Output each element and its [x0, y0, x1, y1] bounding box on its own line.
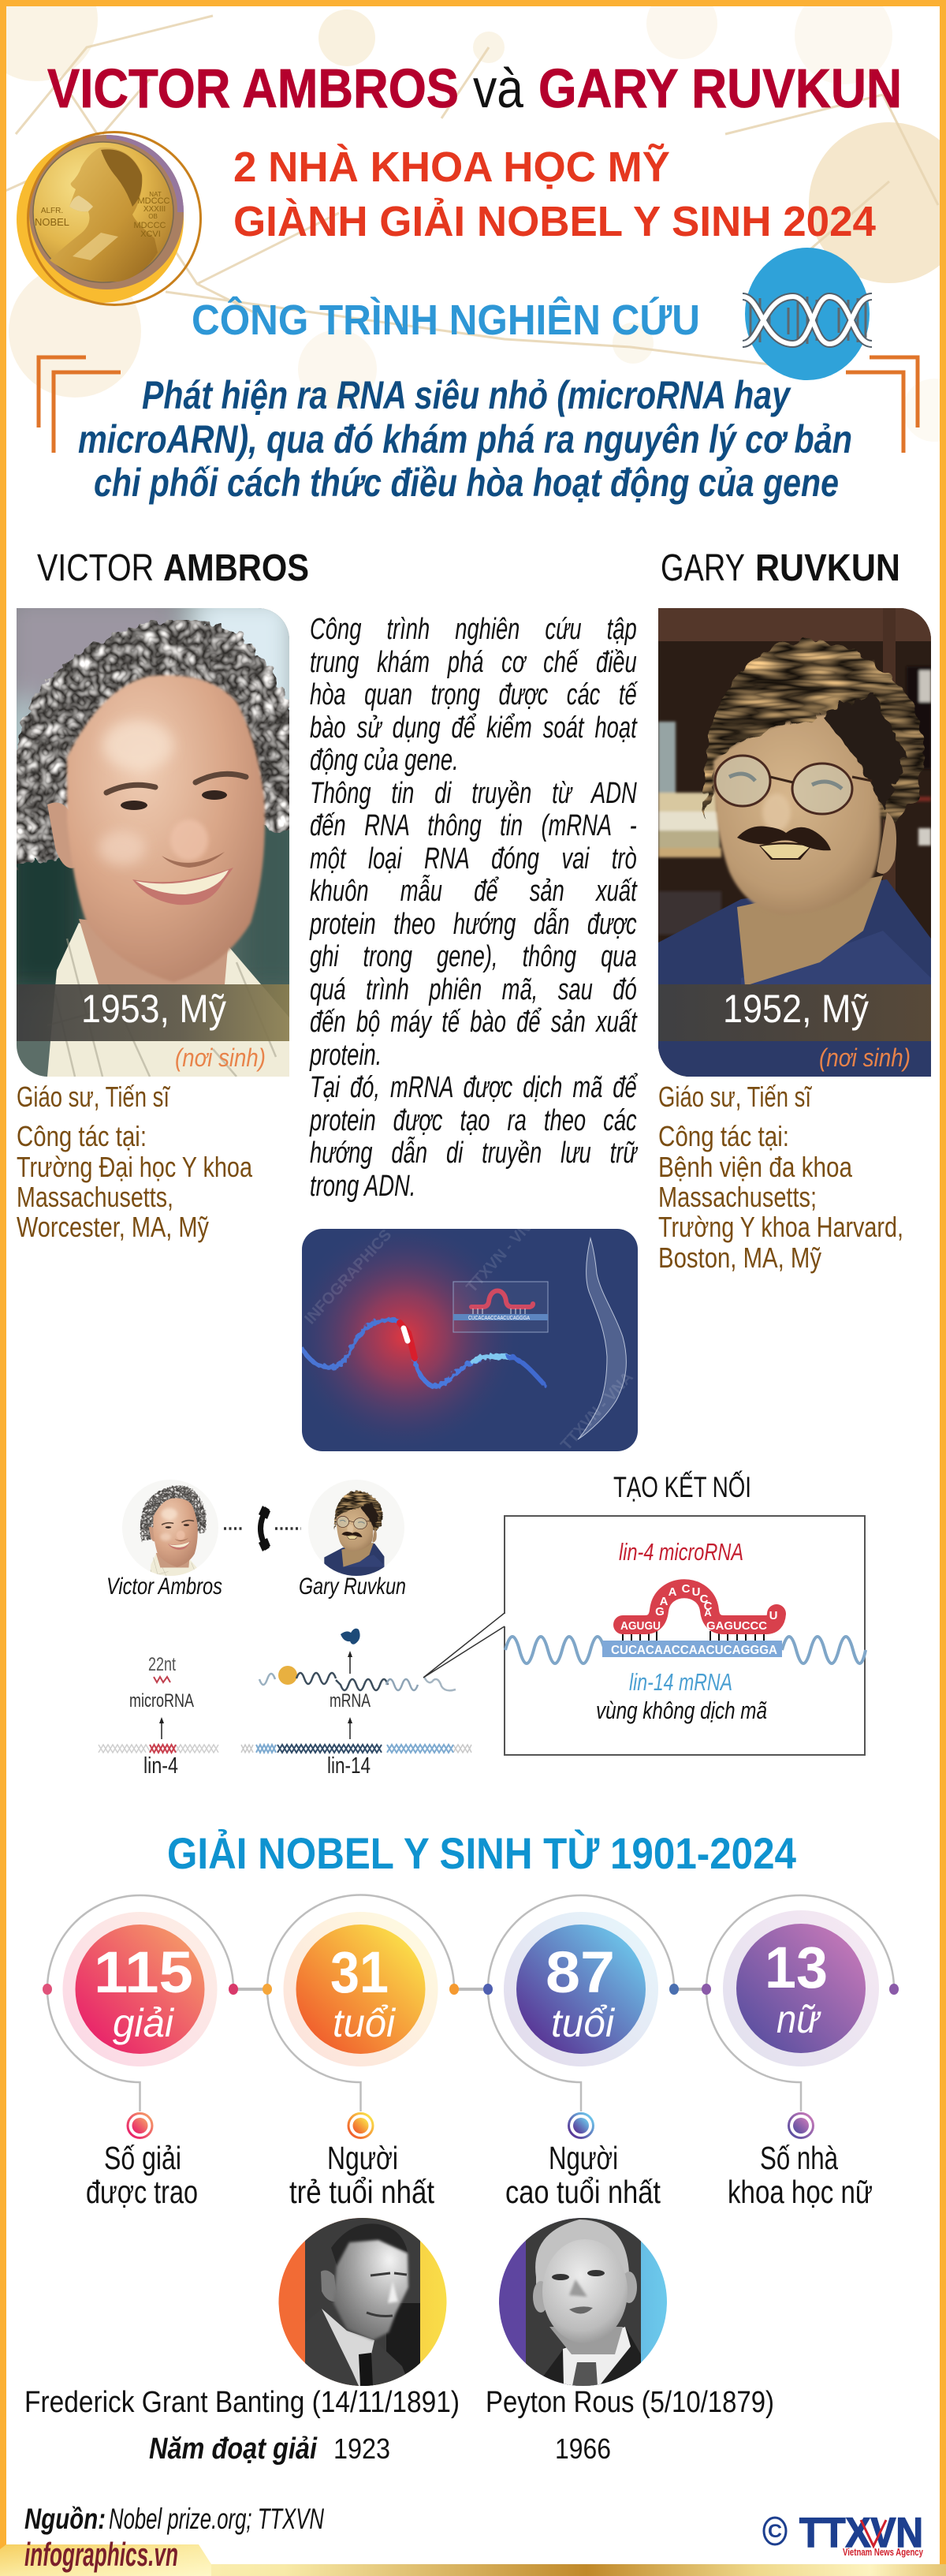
text block: research description: động của gene.: [310, 744, 459, 777]
captions: laureates: Frederick Grant Banting (14/11/1891): [24, 2386, 460, 2419]
text block: research description: ghi trong gene), thông qua: [310, 940, 637, 973]
diagram: lin-4 gene: [99, 1654, 218, 1779]
text block: research description: Thông tin di truyền từ ADN: [310, 776, 637, 809]
affiliation: Gary Ruvkun: Công tác tại:: [658, 1120, 789, 1152]
base pairs: [623, 1631, 764, 1642]
text block: research description: quá trình phiên mã, sau đó: [310, 973, 637, 1006]
callout: lin-4 and lin-14 binding: C: [700, 1592, 709, 1606]
diagram: lin-14 gene: mRNA: [330, 1690, 371, 1712]
award year row: 1966: [555, 2432, 611, 2465]
captions: laureates: Peyton Rous (5/10/1879): [486, 2386, 774, 2419]
stat: youngest 31: [263, 1895, 459, 2210]
callout: lin-4 and lin-14 binding: lin-14 mRNA: [629, 1668, 732, 1696]
stat: 115 awards: được trao: [86, 2174, 198, 2210]
text block: research description: [309, 613, 639, 1202]
stat: 115 awards: [43, 1895, 238, 2210]
portrait: Victor Ambros: [17, 608, 289, 1077]
affiliation: Victor Ambros: Giáo sư, Tiến sĩ: [17, 1081, 171, 1113]
subtitle: 2 NHÀ KHOA HỌC MỸ: [233, 144, 670, 191]
stat: 13 women: nữ: [777, 1997, 821, 2041]
icon: DNA helix: [743, 248, 872, 380]
callout: lin-4 and lin-14 binding: A: [669, 1585, 677, 1599]
stat: oldest 87: Người: [549, 2140, 618, 2176]
stat: 13 women: Số nhà: [760, 2140, 838, 2176]
affiliation: Victor Ambros: [17, 1081, 253, 1243]
callout: lin-4 and lin-14 binding: [423, 1516, 866, 1755]
portrait: Frederick Grant Banting: [278, 2218, 447, 2386]
text block: research description: khuôn mẫu để sản xuất: [310, 875, 637, 908]
title: VICTOR AMBROS: [47, 58, 459, 119]
medal inscription: XCVI: [140, 230, 161, 239]
diagram: lin-4 gene: 22nt: [148, 1654, 176, 1675]
affiliation: Gary Ruvkun: Massachusetts;: [658, 1181, 817, 1213]
portrait: Victor Ambros: 1953, Mỹ: [81, 987, 226, 1031]
logo: TTXVN: TTXVN: [799, 2510, 923, 2556]
RNA strand: [302, 1320, 544, 1386]
portrait: Gary Ruvkun: 1952, Mỹ: [723, 987, 869, 1031]
affiliation: Victor Ambros: Công tác tại:: [17, 1120, 147, 1152]
discovery statement: Phát hiện ra RNA siêu nhỏ (microRNA hay: [142, 373, 791, 417]
brackets: [39, 357, 918, 453]
watermark: INFOGRAPHICS: [301, 1226, 395, 1327]
callout: lin-4 and lin-14 binding: C: [704, 1600, 713, 1613]
affiliation: Gary Ruvkun: Giáo sư, Tiến sĩ: [658, 1081, 813, 1113]
callout: lin-4 and lin-14 binding: GAGUCCC: [706, 1619, 767, 1633]
microRNA hairpin: [623, 1589, 777, 1625]
text block: research description: hướng dẫn di truyền lưu trữ: [310, 1137, 637, 1170]
stat: youngest 31: Người: [327, 2140, 398, 2176]
callout: lin-4 and lin-14 binding: A: [704, 1607, 712, 1618]
callout: lin-4 and lin-14 binding: CUCACAACCAACUCAGGGA: [611, 1644, 777, 1657]
stat: youngest 31: trẻ tuổi nhất: [289, 2174, 435, 2210]
stat: oldest 87: 87: [546, 1939, 615, 2005]
source: Nobel prize.org; TTXVN: [109, 2503, 324, 2535]
medal inscription: OB: [148, 213, 158, 220]
stat: 115 awards: 115: [94, 1939, 193, 2005]
discovery statement: [78, 373, 852, 505]
stat: oldest 87: cao tuổi nhất: [505, 2174, 661, 2210]
text block: research description: bào sử dụng để kiểm soát hoạt: [310, 711, 637, 745]
name: Gary Ruvkun: [661, 547, 900, 589]
medal inscription: NAT: [149, 191, 162, 198]
small portrait: Gary Ruvkun: Gary Ruvkun: [299, 1574, 406, 1600]
name: Victor Ambros: VICTOR: [37, 547, 154, 589]
medal portrait bust: [50, 147, 158, 282]
source: [24, 2503, 324, 2535]
callout: lin-4 and lin-14 binding: U: [692, 1585, 700, 1599]
mRNA wave: [259, 1674, 275, 1685]
stat: youngest 31: tuổi: [333, 2001, 397, 2045]
footer bar: [0, 2536, 946, 2576]
callout: lin-4 and lin-14 binding: U: [769, 1609, 777, 1622]
award year row: [149, 2432, 611, 2466]
worm: [578, 1238, 626, 1439]
logo: TTXVN: [764, 2510, 924, 2558]
portrait: Gary Ruvkun: (nơi sinh): [819, 1043, 911, 1072]
callout: lin-4 and lin-14 binding: C: [682, 1582, 691, 1596]
affiliation: Victor Ambros: Trường Đại học Y khoa: [17, 1151, 253, 1183]
watermark: [304, 1229, 634, 1448]
diagram: lin-14 gene: [241, 1629, 471, 1779]
medal inscription: ALFR.: [41, 207, 63, 215]
award year row: Năm đoạt giải: [149, 2432, 318, 2466]
callout: lin-4 and lin-14 binding: lin-4 microRNA: [619, 1538, 743, 1566]
diagram: lin-4 gene: microRNA: [129, 1690, 194, 1712]
text block: research description: trong ADN.: [310, 1169, 415, 1202]
heading: Nobel statistics: GIẢI NOBEL Y SINH TỪ 1901-2024: [167, 1828, 796, 1878]
medal inscription: NOBEL: [35, 216, 69, 228]
target sequence: [602, 1641, 782, 1657]
stat: youngest 31: 31: [330, 1939, 389, 2005]
text block: research description: protein được tạo ra theo các: [310, 1104, 637, 1137]
image: microRNA illustration: [302, 1229, 638, 1451]
inset: [453, 1282, 548, 1332]
birth info band: [658, 984, 931, 1041]
award year row: 1923: [333, 2432, 390, 2465]
name: Victor Ambros: AMBROS: [163, 547, 309, 589]
gene strip: [241, 1745, 471, 1753]
name: Victor Ambros: [37, 547, 309, 589]
small portrait: Victor Ambros: [106, 1480, 222, 1600]
mRNA waves: [505, 1637, 605, 1663]
title: GARY RUVKUN: [538, 58, 902, 119]
stat: oldest 87: tuổi: [551, 2001, 616, 2045]
stat: 13 women: khoa học nữ: [728, 2174, 873, 2210]
affiliation: Victor Ambros: Massachusetts,: [17, 1181, 173, 1213]
text block: research description: Tại đó, mRNA được dịch mã để: [310, 1071, 637, 1104]
callout: lin-4 and lin-14 binding: A: [660, 1595, 669, 1608]
birth info band: [17, 984, 289, 1041]
heading: making a connection: TẠO KẾT NỐI: [613, 1470, 751, 1503]
stat: oldest 87: [483, 1895, 679, 2210]
text block: research description: đến RNA thông tin (mRNA -: [310, 809, 637, 842]
title: và: [473, 58, 523, 119]
title: [47, 58, 902, 119]
portrait: Gary Ruvkun: [658, 608, 931, 1077]
affiliation: Gary Ruvkun: Bệnh viện đa khoa: [658, 1151, 853, 1183]
stat: 13 women: 13: [765, 1935, 828, 2000]
subtitle: GIÀNH GIẢI NOBEL Y SINH 2024: [233, 198, 876, 245]
image: microRNA illustration: CUCACAACCAACUCAGGGA: [468, 1314, 530, 1321]
text block: research description: trung khám phá cơ chế điều: [310, 645, 637, 678]
diagram: lin-4 gene: lin-4: [143, 1753, 178, 1779]
text block: research description: đến bộ máy tế bào để sản xuất: [310, 1006, 637, 1039]
affiliation: Victor Ambros: Worcester, MA, Mỹ: [17, 1211, 209, 1243]
stat: 115 awards: giải: [113, 2001, 175, 2045]
text block: research description: protein theo hướng dẫn được: [310, 907, 637, 940]
diagram: lin-14 gene: lin-14: [327, 1753, 371, 1779]
logo: TTXVN: C: [768, 2521, 782, 2542]
name: Gary Ruvkun: RUVKUN: [755, 547, 900, 589]
watermark: TTXVN - VNA: [557, 1368, 637, 1454]
small portrait: Victor Ambros: Victor Ambros: [106, 1574, 222, 1600]
small portrait: Gary Ruvkun: [299, 1480, 406, 1600]
medal inscription: [35, 191, 170, 239]
icon: Nobel medal: [17, 133, 200, 304]
connectors: [233, 1988, 706, 1991]
medal inscription: MDCCC: [138, 196, 170, 206]
name: Gary Ruvkun: GARY: [661, 547, 745, 589]
text block: research description: hòa quan trọng được các tế: [310, 678, 637, 711]
text block: research description: một loại RNA đóng vai trò: [310, 842, 637, 875]
callout: lin-4 and lin-14 binding: AGUGU: [620, 1619, 661, 1633]
portrait: Peyton Rous: [499, 2218, 667, 2386]
watermark: TTXVN - VNA: [463, 1211, 542, 1296]
subtitle: [233, 144, 876, 245]
callout: lin-4 and lin-14 binding: G: [655, 1605, 665, 1618]
stat: 13 women: [702, 1895, 899, 2210]
heading: research work: CÔNG TRÌNH NGHIÊN CỨU: [192, 296, 700, 344]
icon: telephone call: [224, 1506, 301, 1551]
text block: research description: protein.: [310, 1038, 382, 1071]
affiliation: Gary Ruvkun: [658, 1081, 903, 1274]
medal inscription: XXXIII: [143, 205, 166, 214]
callout: lin-4 and lin-14 binding: vùng không dịch mã: [596, 1697, 767, 1724]
protein: [341, 1629, 360, 1645]
affiliation: Gary Ruvkun: Boston, MA, Mỹ: [658, 1241, 821, 1274]
captions: laureates: [24, 2386, 774, 2419]
portrait: Victor Ambros: (nơi sinh): [175, 1043, 266, 1072]
stat: 115 awards: Số giải: [104, 2140, 181, 2176]
text block: research description: Công trình nghiên cứu tập: [310, 613, 637, 646]
medal inscription: MDCCC: [134, 221, 166, 230]
footer bar: infographics.vn: [24, 2536, 178, 2573]
source: Nguồn:: [24, 2503, 106, 2535]
background decoration: [0, 0, 946, 442]
